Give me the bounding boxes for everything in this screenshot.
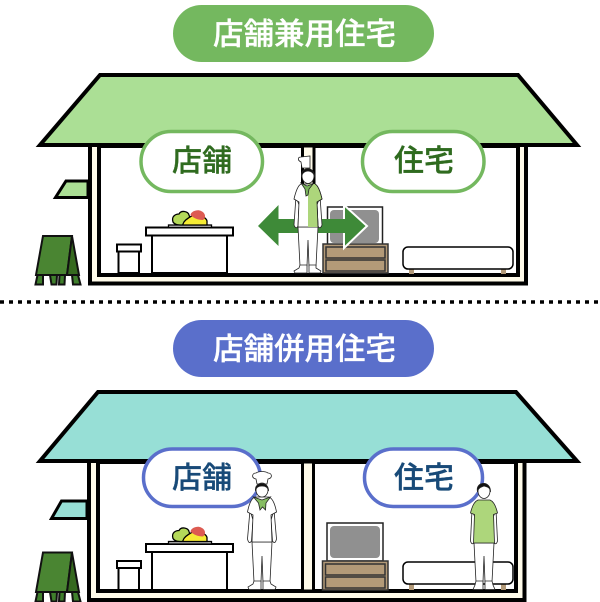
label: shop: 店舗: [172, 462, 232, 495]
chef figure: [248, 472, 276, 590]
label: residence: [364, 449, 482, 506]
label: shop: [141, 132, 262, 192]
roof: [40, 75, 577, 145]
title pill: 店舗併用住宅: [173, 320, 434, 377]
stool: [117, 244, 141, 273]
house walls: [89, 462, 524, 600]
stool: [117, 561, 141, 590]
label: shop: [144, 449, 260, 506]
person: half chef half resident: [294, 156, 322, 273]
television: [327, 523, 383, 561]
dotted divider: [0, 300, 600, 304]
hanging shop sign: [56, 181, 88, 198]
double-headed arrow: [258, 205, 367, 248]
title pill: 店舗併用住宅: 店舗併用住宅: [213, 332, 396, 366]
label: residence: 住宅: [394, 462, 454, 495]
house walls: [90, 146, 526, 284]
sofa: [403, 247, 513, 274]
roof: [40, 392, 577, 461]
standing sign board: [36, 236, 80, 284]
sofa: [403, 562, 513, 590]
hanging shop sign: [52, 501, 87, 518]
scene: shop-attached house: [36, 320, 577, 602]
table: [146, 544, 233, 590]
table: [146, 228, 233, 273]
title pill: 店舗兼用住宅: 店舗兼用住宅: [213, 18, 396, 52]
TV cabinet: [322, 561, 388, 590]
title pill: 店舗兼用住宅: [173, 5, 434, 62]
resident figure: [470, 483, 498, 590]
scene: shop-combined house: [36, 5, 577, 284]
arrow right head outline: [344, 205, 367, 248]
label: shop: 店舗: [172, 145, 232, 178]
food on plate: [168, 527, 212, 544]
TV cabinet: [323, 244, 388, 273]
label: residence: [362, 132, 484, 192]
food on plate: [168, 210, 212, 228]
standing sign board: [36, 552, 80, 602]
television: [328, 207, 382, 245]
label: residence: 住宅: [394, 145, 454, 178]
